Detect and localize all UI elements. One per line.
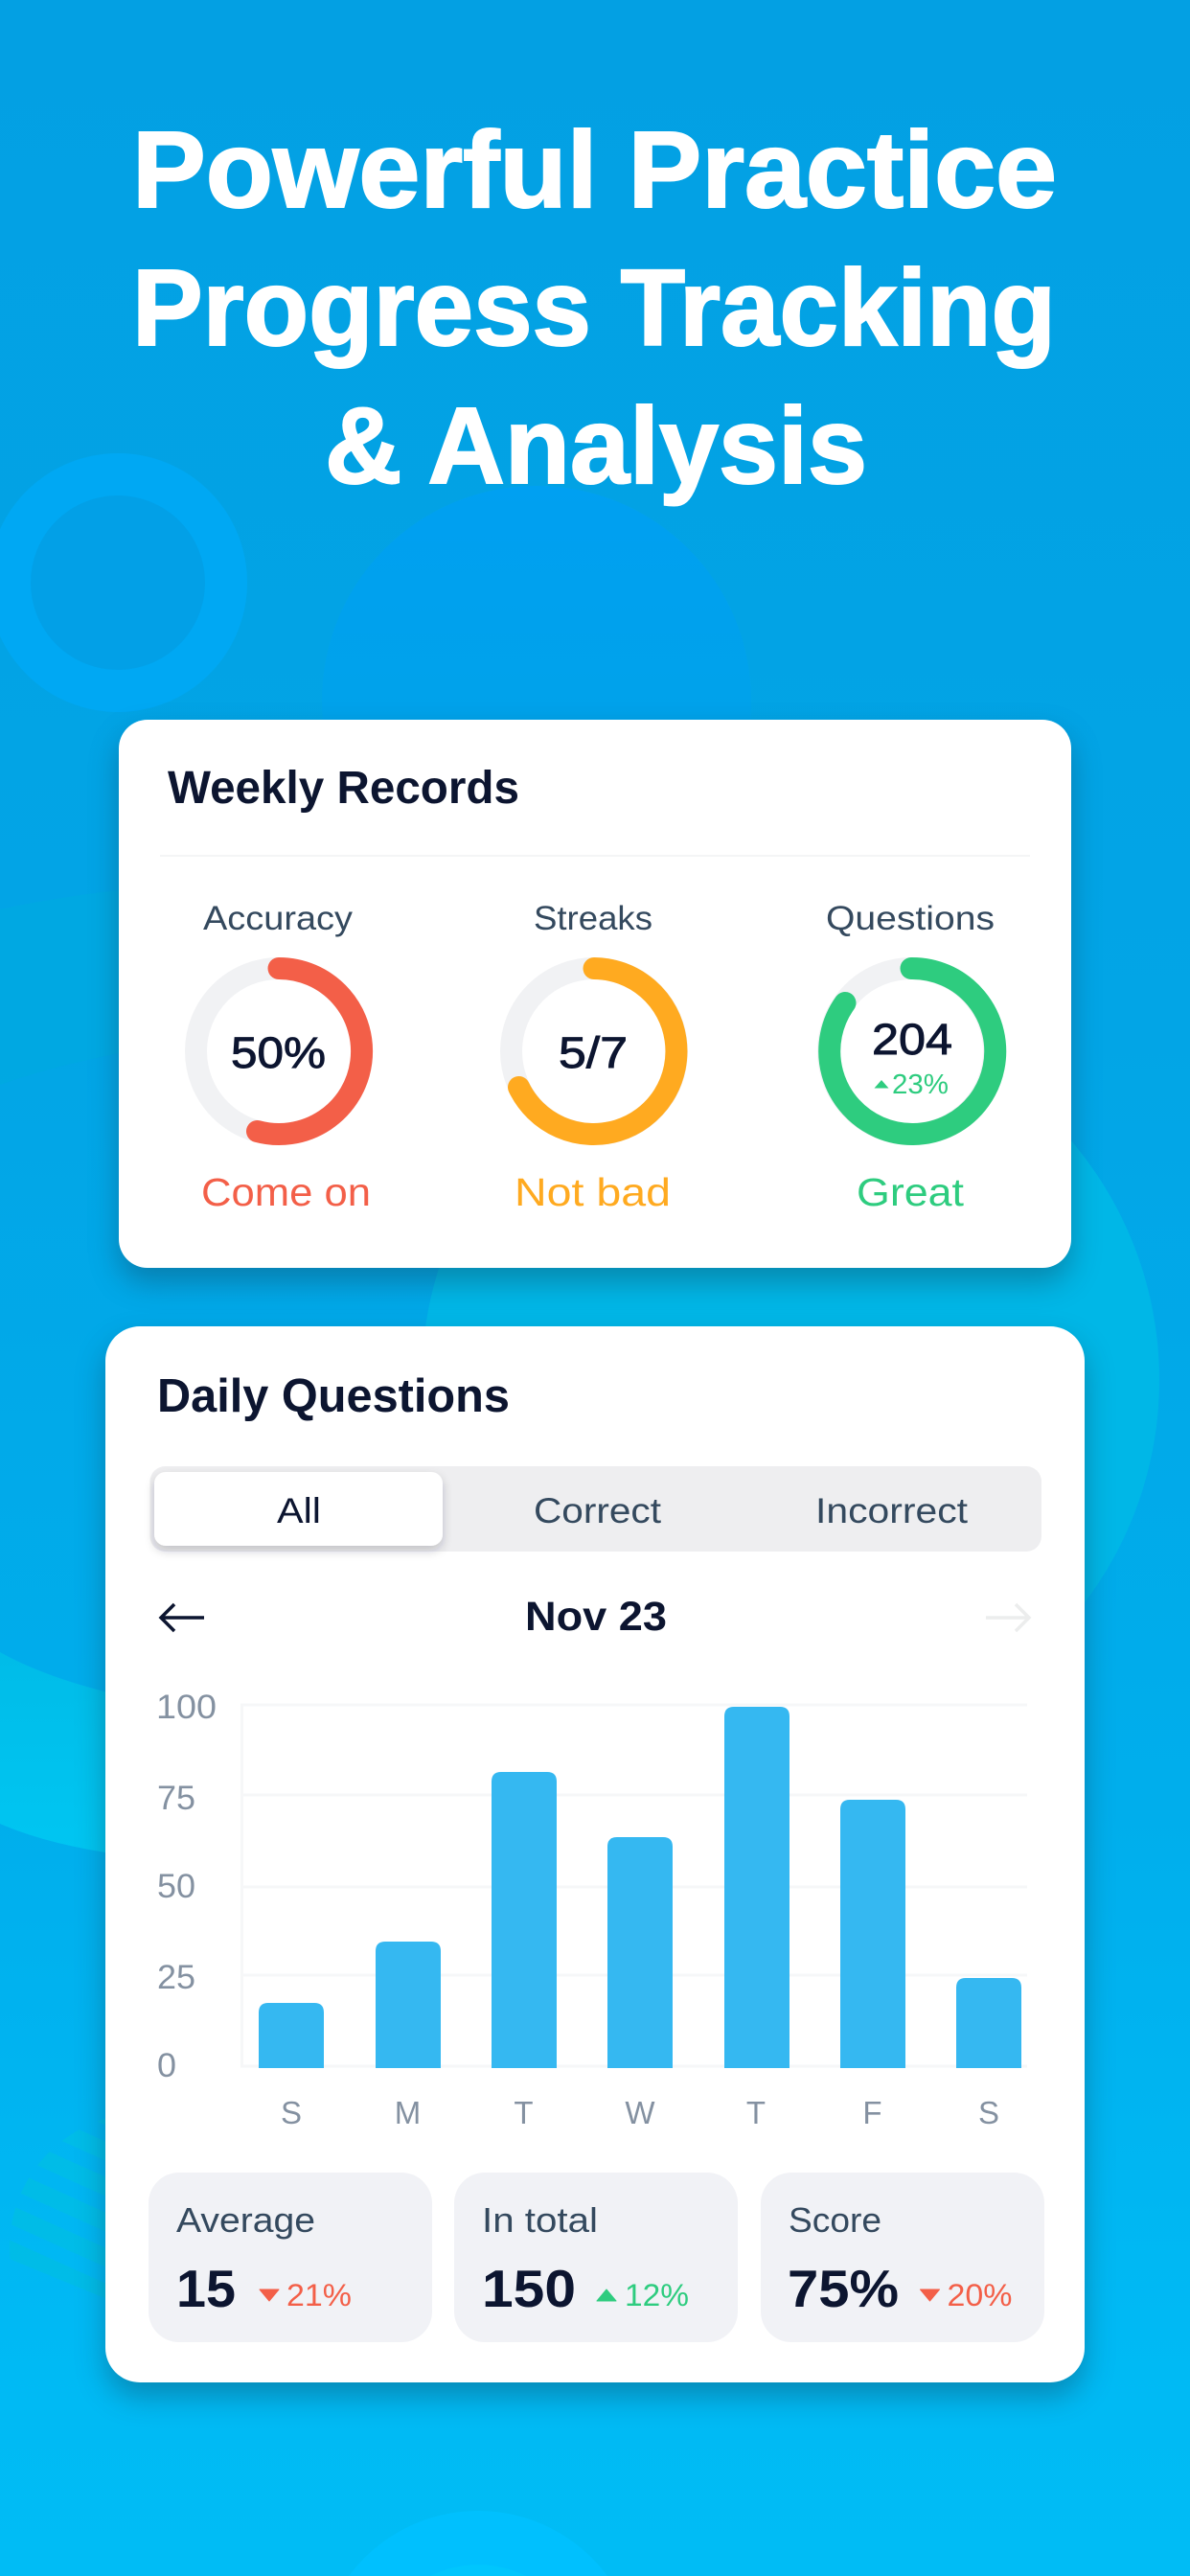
stat: score: 20% (947, 2278, 1012, 2312)
bar chart: S (281, 2095, 302, 2130)
metric: questions: Great (857, 1170, 965, 1214)
segmented control: Incorrect (815, 1491, 969, 1530)
metric: accuracy: Come on (201, 1170, 371, 1214)
panel: weekly records (119, 720, 1071, 1268)
metric: questions (826, 900, 995, 1214)
segmented control: All (277, 1491, 321, 1530)
segmented control (149, 1466, 1041, 1552)
metric: accuracy: Accuracy (203, 900, 354, 937)
stat: in total (454, 2173, 738, 2342)
date navigation: Nov 23 (525, 1594, 667, 1640)
bar chart: 50 (157, 1868, 195, 1905)
date navigation (161, 1594, 1029, 1640)
bar chart: T (514, 2095, 534, 2130)
metric: streaks (512, 900, 676, 1214)
title: Powerful Practice (132, 109, 1057, 230)
title: Progress Tracking (132, 247, 1056, 368)
stat: score: Score (789, 2200, 881, 2240)
metric: streaks: Not bad (515, 1170, 671, 1214)
stat: average: Average (176, 2200, 315, 2240)
segmented control: Correct (534, 1491, 662, 1530)
metric: questions: 23% (892, 1070, 949, 1100)
metric: accuracy: 50% (231, 1028, 326, 1077)
heading: daily questions: Daily Questions (157, 1370, 510, 1422)
bar chart: 25 (157, 1959, 195, 1996)
bar chart: T (746, 2095, 766, 2130)
bar chart: F (862, 2095, 882, 2130)
heading: weekly records: Weekly Records (168, 763, 519, 814)
stat: in total: In total (482, 2200, 598, 2240)
bar chart (156, 1689, 1027, 2130)
bar chart: 100 (156, 1689, 217, 1726)
metric: streaks: Streaks (534, 900, 652, 937)
title: & Analysis (325, 385, 867, 506)
stat: score: 75% (788, 2259, 899, 2318)
metric: questions: 204 (872, 1015, 952, 1064)
title (132, 109, 1057, 506)
stat: average (149, 2173, 432, 2342)
bar chart: W (625, 2095, 655, 2130)
bar chart: 75 (157, 1780, 195, 1817)
metric: streaks: 5/7 (559, 1028, 628, 1077)
stat: average: 15 (176, 2259, 236, 2318)
metric: accuracy (195, 900, 371, 1214)
stat: in total: 150 (482, 2259, 576, 2318)
stat: in total: 12% (625, 2278, 689, 2312)
metric: questions: Questions (826, 900, 995, 937)
stat: score (761, 2173, 1044, 2342)
stat: average: 21% (286, 2278, 352, 2312)
bar chart: S (978, 2095, 999, 2130)
panel: daily questions (105, 1326, 1085, 2382)
bar chart: M (395, 2095, 421, 2130)
bar chart: 0 (157, 2047, 176, 2084)
